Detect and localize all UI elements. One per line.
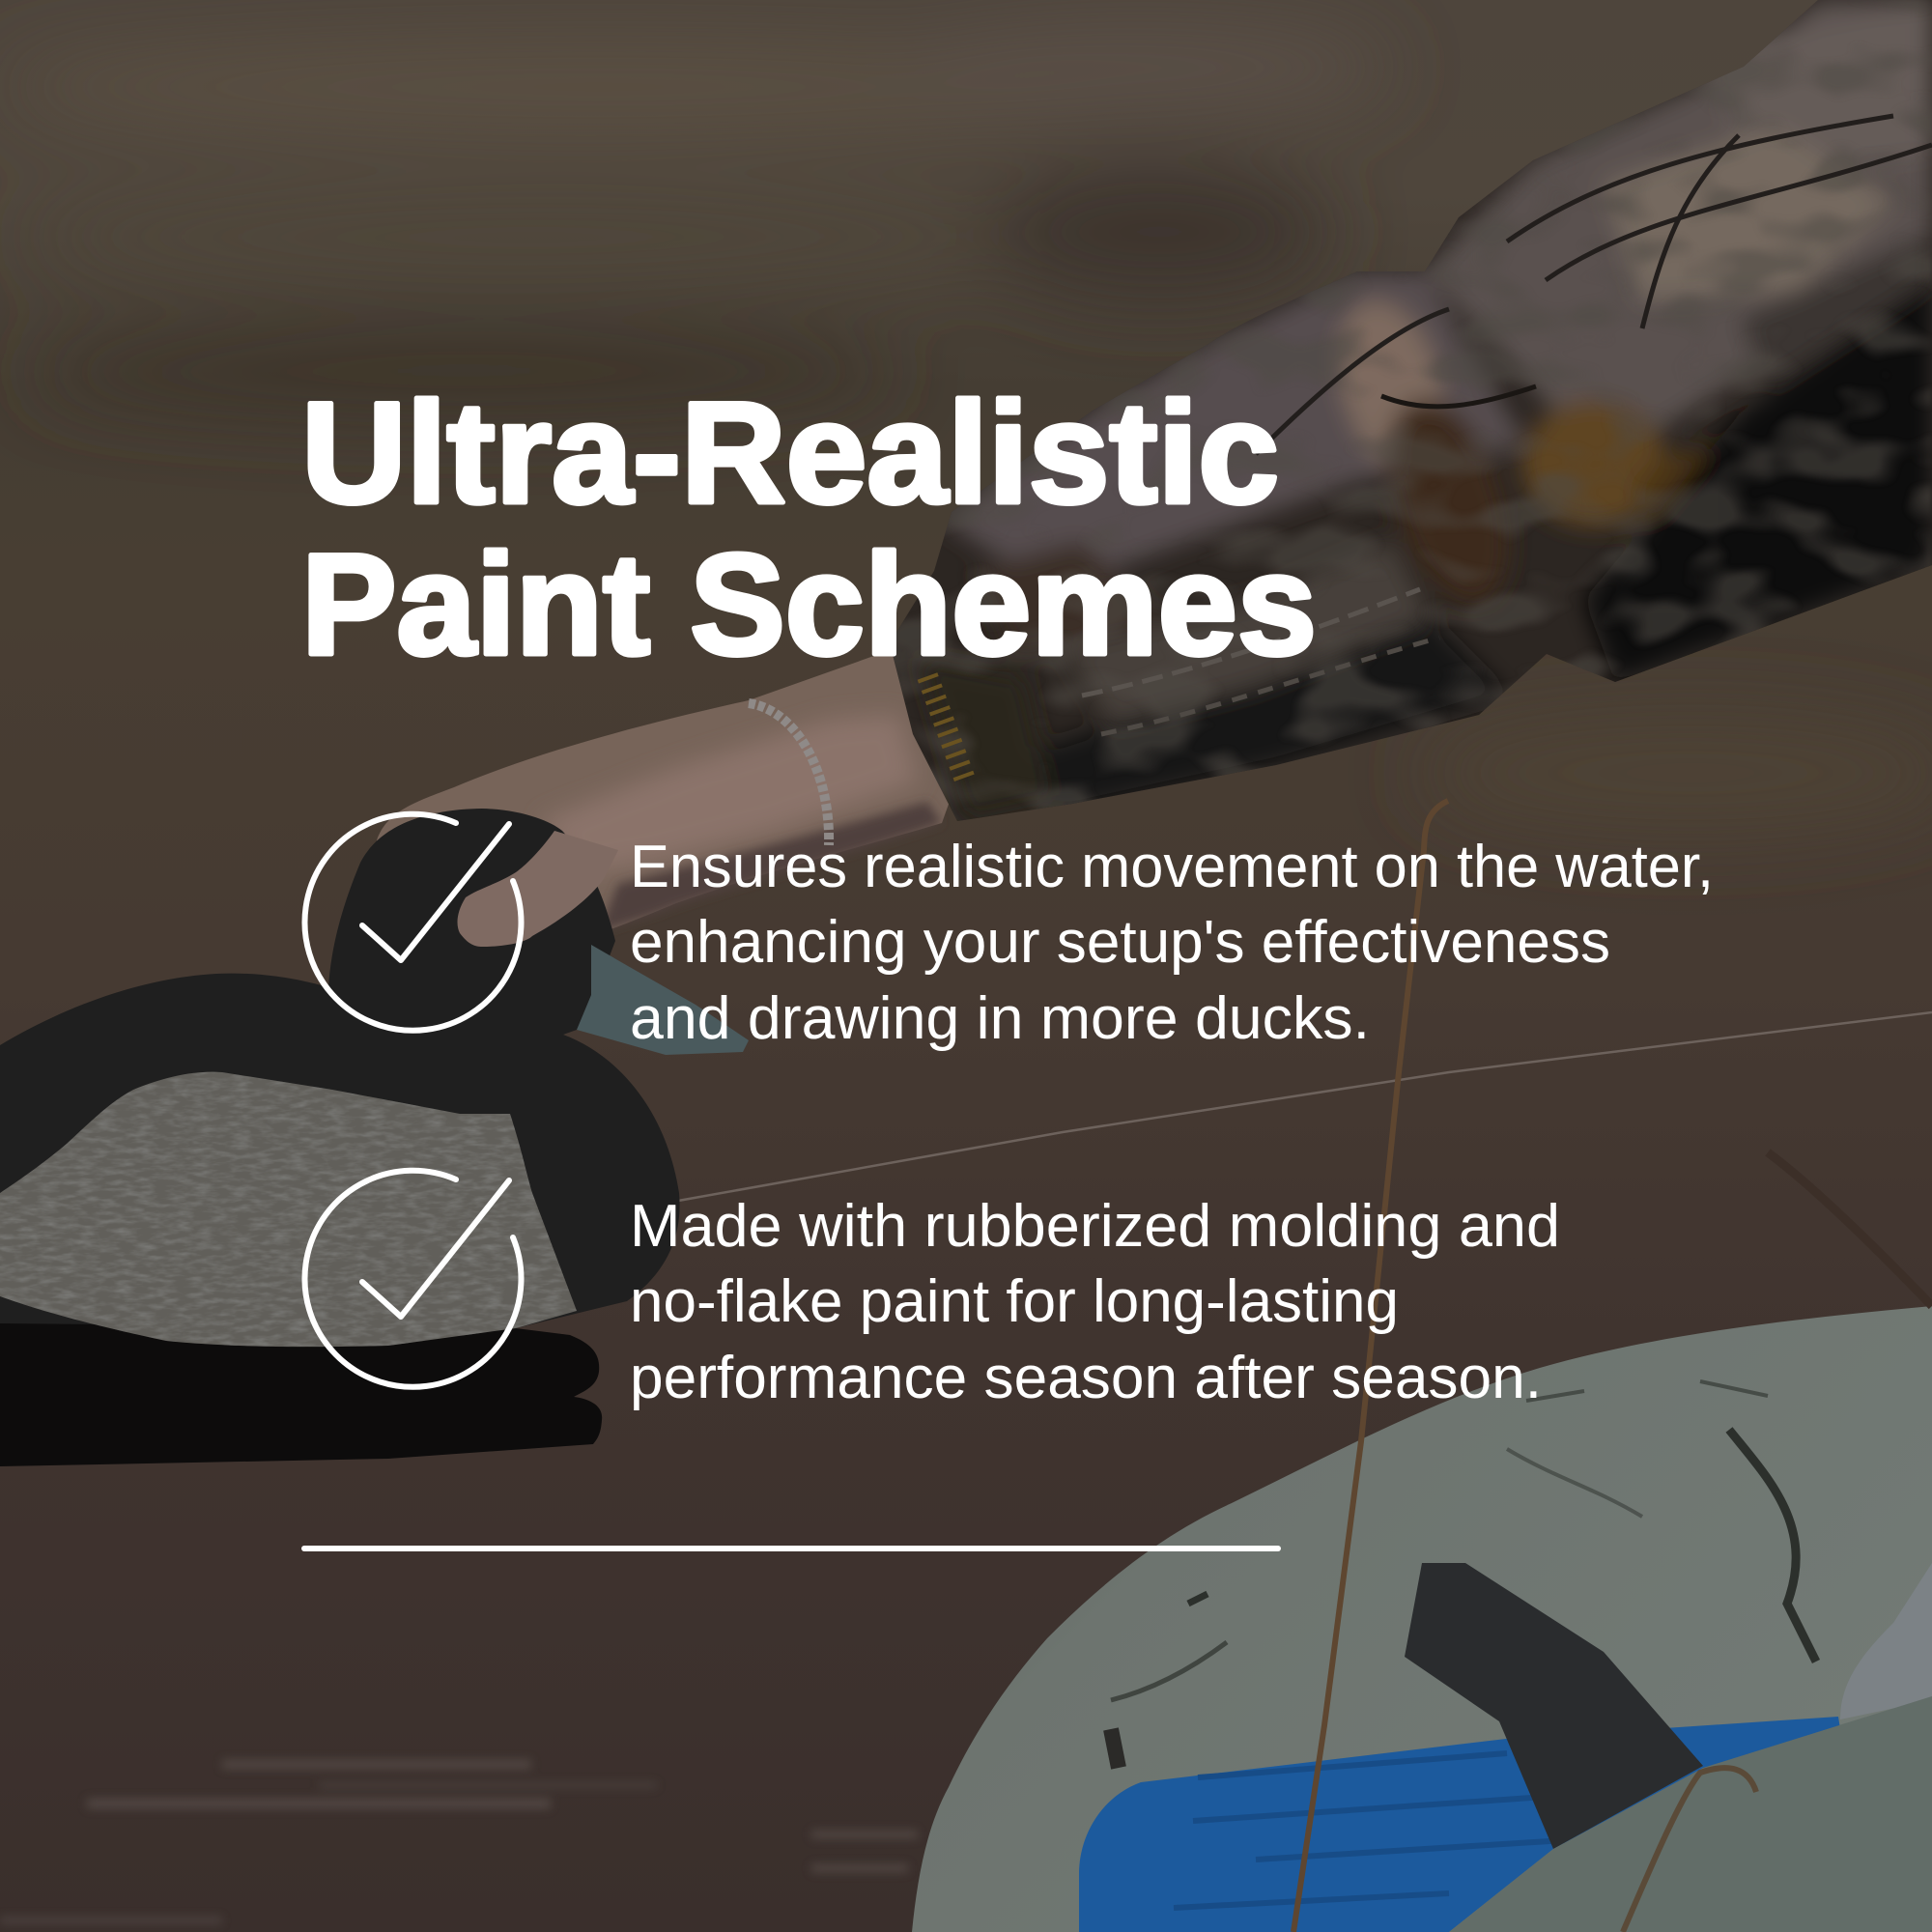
thin fishing line (678, 1012, 1932, 1201)
camouflage sleeve (893, 0, 1932, 821)
title (301, 372, 1317, 685)
title: Ultra-Realistic (301, 372, 1279, 533)
rope knot (1623, 1768, 1756, 1932)
divider line (301, 1546, 1281, 1551)
hand and wrist (377, 647, 956, 952)
duck decoy (0, 809, 749, 1466)
branch right (1768, 1152, 1932, 1306)
text block: benefit 2: Made with rubberized molding and (630, 1193, 1560, 1260)
title: Paint Schemes (301, 524, 1317, 685)
text block: benefit 1: and drawing in more ducks. (630, 985, 1370, 1052)
bill (577, 945, 749, 1055)
keel (0, 1323, 602, 1466)
blue paddle blade (1079, 1717, 1840, 1932)
inflatable boat (912, 1306, 1932, 1932)
front tube (1449, 1696, 1932, 1932)
thumb on duck head (458, 831, 618, 947)
reed stem (1293, 801, 1448, 1932)
duck body (0, 809, 680, 1352)
feather texture (0, 1072, 577, 1347)
boat side tube (1840, 1563, 1932, 1719)
bracelet (749, 703, 829, 845)
text block: benefit 2: performance season after season. (630, 1345, 1542, 1411)
text block: benefit 2: no-flake paint for long-lasting (630, 1268, 1399, 1335)
icon: check circle 1 (304, 814, 521, 1031)
text block: benefit 2 (630, 1193, 1560, 1411)
text block: benefit 1 (630, 834, 1714, 1052)
white flank (0, 1072, 577, 1347)
dark oarlock bracket (1405, 1563, 1703, 1849)
icon: check circle 2 (304, 1171, 521, 1387)
water ripples (0, 1760, 918, 1924)
text block: benefit 1: enhancing your setup's effectiveness (630, 909, 1610, 976)
text block: benefit 1: Ensures realistic movement on the water, (630, 834, 1714, 900)
